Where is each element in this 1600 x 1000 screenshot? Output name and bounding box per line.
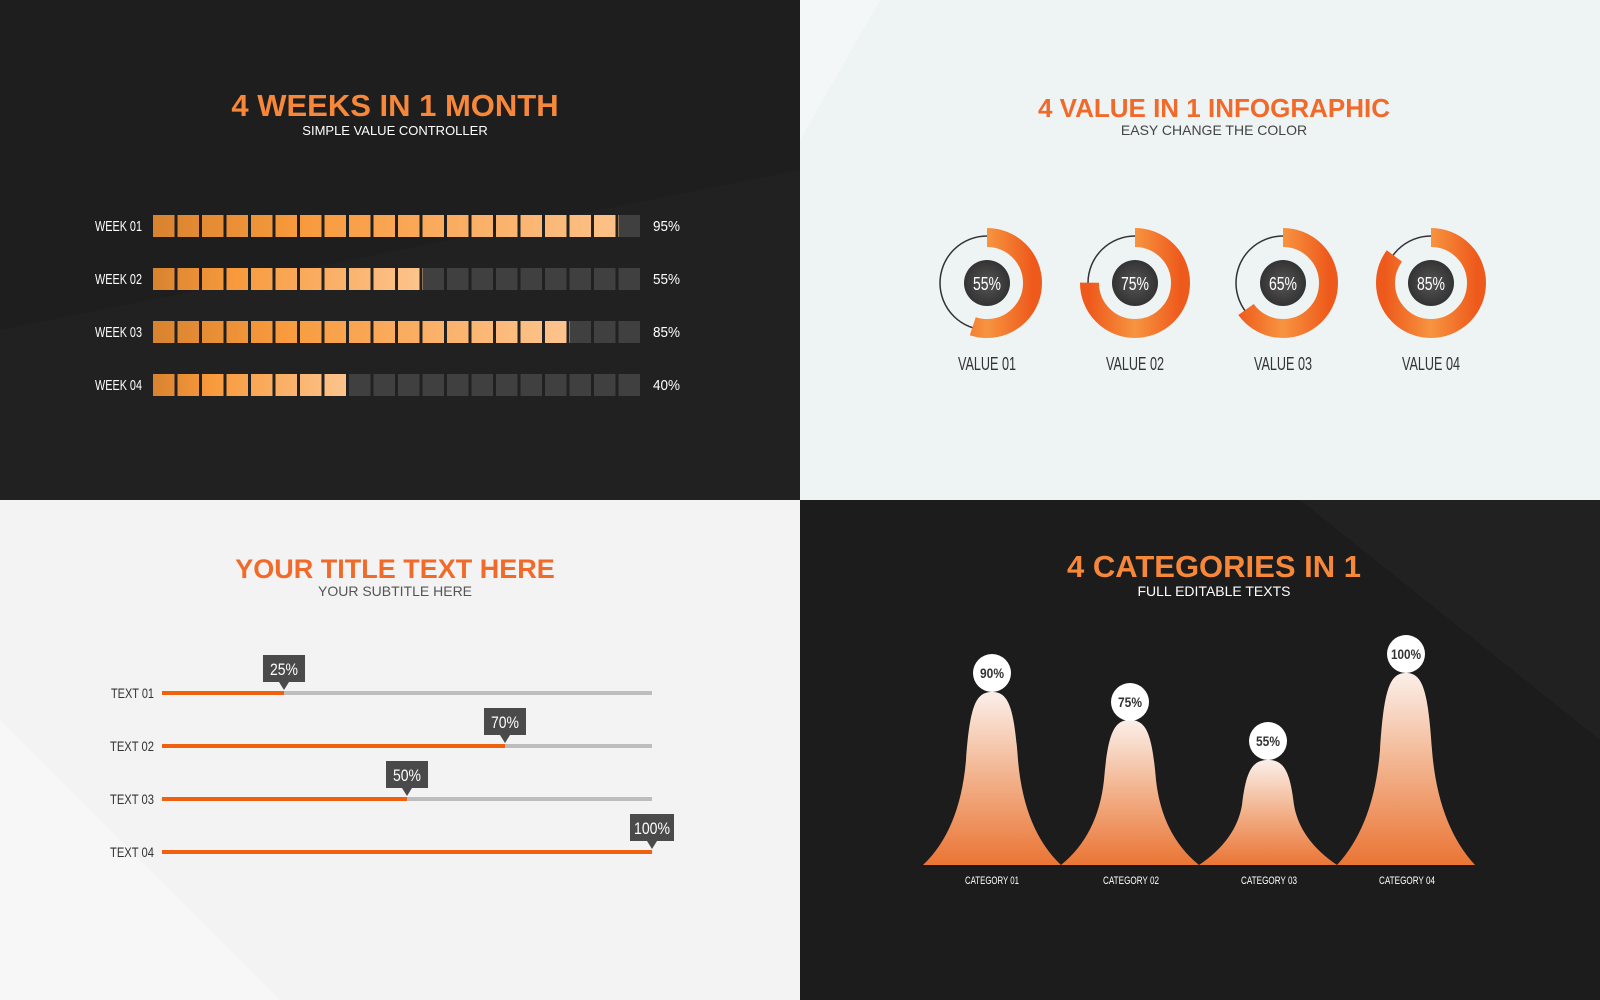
chart: week squares: 85% xyxy=(653,324,680,341)
chart: week squares: WEEK 01 xyxy=(95,218,142,235)
chart: bell curves: CATEGORY 01 xyxy=(965,875,1019,887)
chart: progress bars: TEXT 04 xyxy=(110,844,154,860)
chart: donut 85%: VALUE 04 xyxy=(1402,354,1460,374)
chart: donut 85% xyxy=(1384,236,1478,374)
chart: bell curves: 55% xyxy=(1256,733,1280,749)
panel: text bars background xyxy=(0,500,800,1000)
chart: donut 85%: 85% xyxy=(1417,274,1445,294)
chart: donut 75%: 75% xyxy=(1121,274,1149,294)
chart: donut 55%: VALUE 01 xyxy=(958,354,1016,374)
title: your title xyxy=(235,554,555,599)
chart: bell curves: CATEGORY 04 xyxy=(1379,875,1435,887)
title: weeks: SIMPLE VALUE CONTROLLER xyxy=(302,123,488,138)
chart: progress bars: TEXT 01 xyxy=(111,685,154,701)
chart: bell curves: 75% xyxy=(1118,694,1142,710)
panel: categories background xyxy=(800,500,1600,1000)
chart: week squares: WEEK 02 xyxy=(95,271,142,288)
chart: progress bars xyxy=(110,655,674,860)
chart: donut 65%: 65% xyxy=(1269,274,1297,294)
chart: donut 65%: VALUE 03 xyxy=(1254,354,1312,374)
title: values: 4 VALUE IN 1 INFOGRAPHIC xyxy=(1038,93,1390,123)
title: values: EASY CHANGE THE COLOR xyxy=(1121,122,1307,138)
chart: donut 55%: 55% xyxy=(973,274,1001,294)
title: your title: YOUR SUBTITLE HERE xyxy=(318,583,472,599)
title: values xyxy=(1038,93,1390,138)
title: your title: YOUR TITLE TEXT HERE xyxy=(235,554,555,584)
chart: progress bars: 25% xyxy=(270,660,298,679)
chart: bell curves xyxy=(923,635,1475,887)
chart: donut 65% xyxy=(1236,236,1330,374)
panel: values background xyxy=(800,0,1600,500)
title: weeks: 4 WEEKS IN 1 MONTH xyxy=(231,88,559,123)
chart: week squares: WEEK 04 xyxy=(95,377,142,394)
chart: donut 75%: VALUE 02 xyxy=(1106,354,1164,374)
chart: progress bars: 100% xyxy=(634,819,670,838)
title: categories: FULL EDITABLE TEXTS xyxy=(1137,583,1291,599)
chart: donut 55% xyxy=(940,236,1034,374)
chart: week squares: WEEK 03 xyxy=(95,324,142,341)
chart: bell curves: 100% xyxy=(1391,646,1421,662)
chart: week squares: 40% xyxy=(653,377,680,394)
chart: progress bars: 70% xyxy=(491,713,519,732)
chart: week squares xyxy=(95,215,680,396)
chart: bell curves: 90% xyxy=(980,665,1004,681)
chart: bell curves: CATEGORY 03 xyxy=(1241,875,1297,887)
callout tags xyxy=(263,655,674,849)
chart: week squares: 55% xyxy=(653,271,680,288)
chart: progress bars: TEXT 02 xyxy=(110,738,154,754)
chart: progress bars: 50% xyxy=(393,766,421,785)
chart: donut 75% xyxy=(1088,236,1182,374)
title: categories: 4 CATEGORIES IN 1 xyxy=(1067,549,1361,584)
chart: progress bars: TEXT 03 xyxy=(110,791,154,807)
chart: bell curves: CATEGORY 02 xyxy=(1103,875,1159,887)
panel: weeks background xyxy=(0,0,800,500)
chart: week squares: 95% xyxy=(653,218,680,235)
